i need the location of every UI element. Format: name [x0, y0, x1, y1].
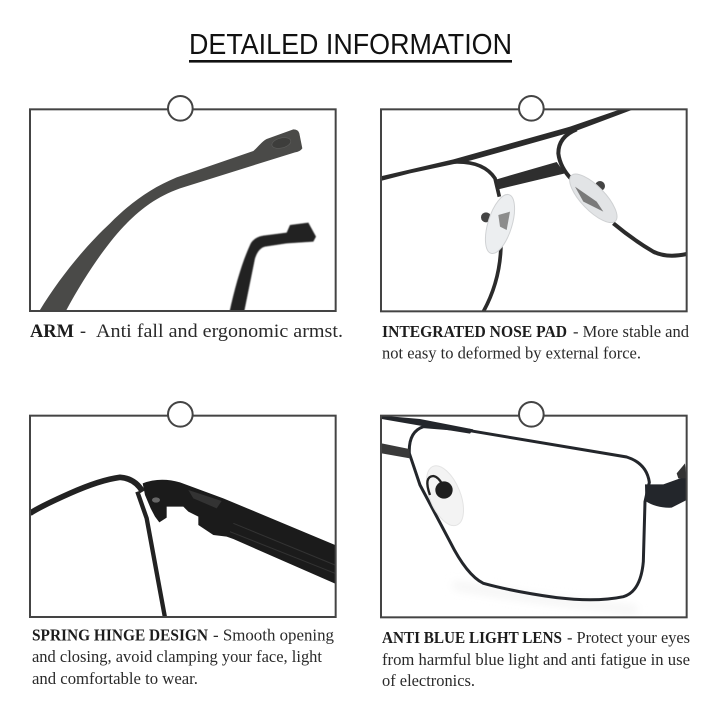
nose pad caption: - More stable and — [573, 322, 690, 341]
lens caption: from harmful blue light and anti fatigue in use — [382, 650, 690, 669]
title: DETAILED INFORMATION — [189, 29, 512, 61]
panel: spring hinge — [30, 402, 337, 618]
screw — [152, 497, 160, 503]
lens caption: ANTI BLUE LIGHT LENS — [382, 628, 562, 647]
lens caption — [382, 628, 690, 690]
lens rim — [409, 422, 649, 600]
hinge caption: and comfortable to wear. — [32, 669, 198, 688]
hinge tip — [677, 463, 687, 478]
panel: anti blue light lens — [381, 402, 687, 617]
hinge marker circle — [168, 402, 193, 427]
lens shadow — [453, 585, 637, 610]
lens caption: of electronics. — [382, 671, 475, 690]
rim top — [30, 477, 143, 513]
right rim — [558, 129, 687, 256]
arm temple photo — [38, 129, 302, 313]
arm logo oval — [272, 138, 291, 148]
nose pad caption: not easy to deformed by external force. — [382, 344, 641, 362]
hinge caption: SPRING HINGE DESIGN — [32, 626, 208, 645]
hinge frame — [30, 416, 336, 617]
bridge stub — [382, 443, 410, 458]
arm frame — [30, 109, 336, 311]
arm caption: - — [80, 321, 86, 342]
top bar — [382, 416, 473, 434]
nose pad caption: INTEGRATED NOSE PAD — [382, 322, 567, 341]
hinge block and temple — [143, 480, 337, 584]
nose pad frame — [381, 109, 687, 311]
lens marker circle — [519, 402, 544, 427]
nose pad caption — [382, 322, 690, 362]
hinge caption: and closing, avoid clamping your face, light — [32, 647, 322, 666]
top bar — [382, 110, 632, 181]
left nose pad — [481, 194, 515, 254]
lens caption: - Protect your eyes — [567, 628, 690, 647]
hinge caption — [32, 626, 334, 688]
arm caption: ARM — [30, 321, 74, 342]
hinge caption: - Smooth opening — [213, 626, 334, 645]
temple grooves — [230, 523, 335, 573]
arm marker circle — [168, 96, 193, 121]
nose pad — [426, 465, 464, 526]
panel: nose pad — [381, 96, 687, 312]
second arm tip — [229, 223, 316, 313]
end piece and hinge — [645, 476, 687, 508]
right nose pad — [569, 174, 618, 224]
nose pad marker circle — [519, 96, 544, 121]
lens frame — [381, 416, 687, 617]
rim side — [137, 492, 165, 618]
left rim — [453, 162, 501, 312]
arm caption: Anti fall and ergonomic armst. — [96, 321, 343, 342]
bridge — [497, 162, 565, 189]
panel: arm — [30, 96, 336, 313]
